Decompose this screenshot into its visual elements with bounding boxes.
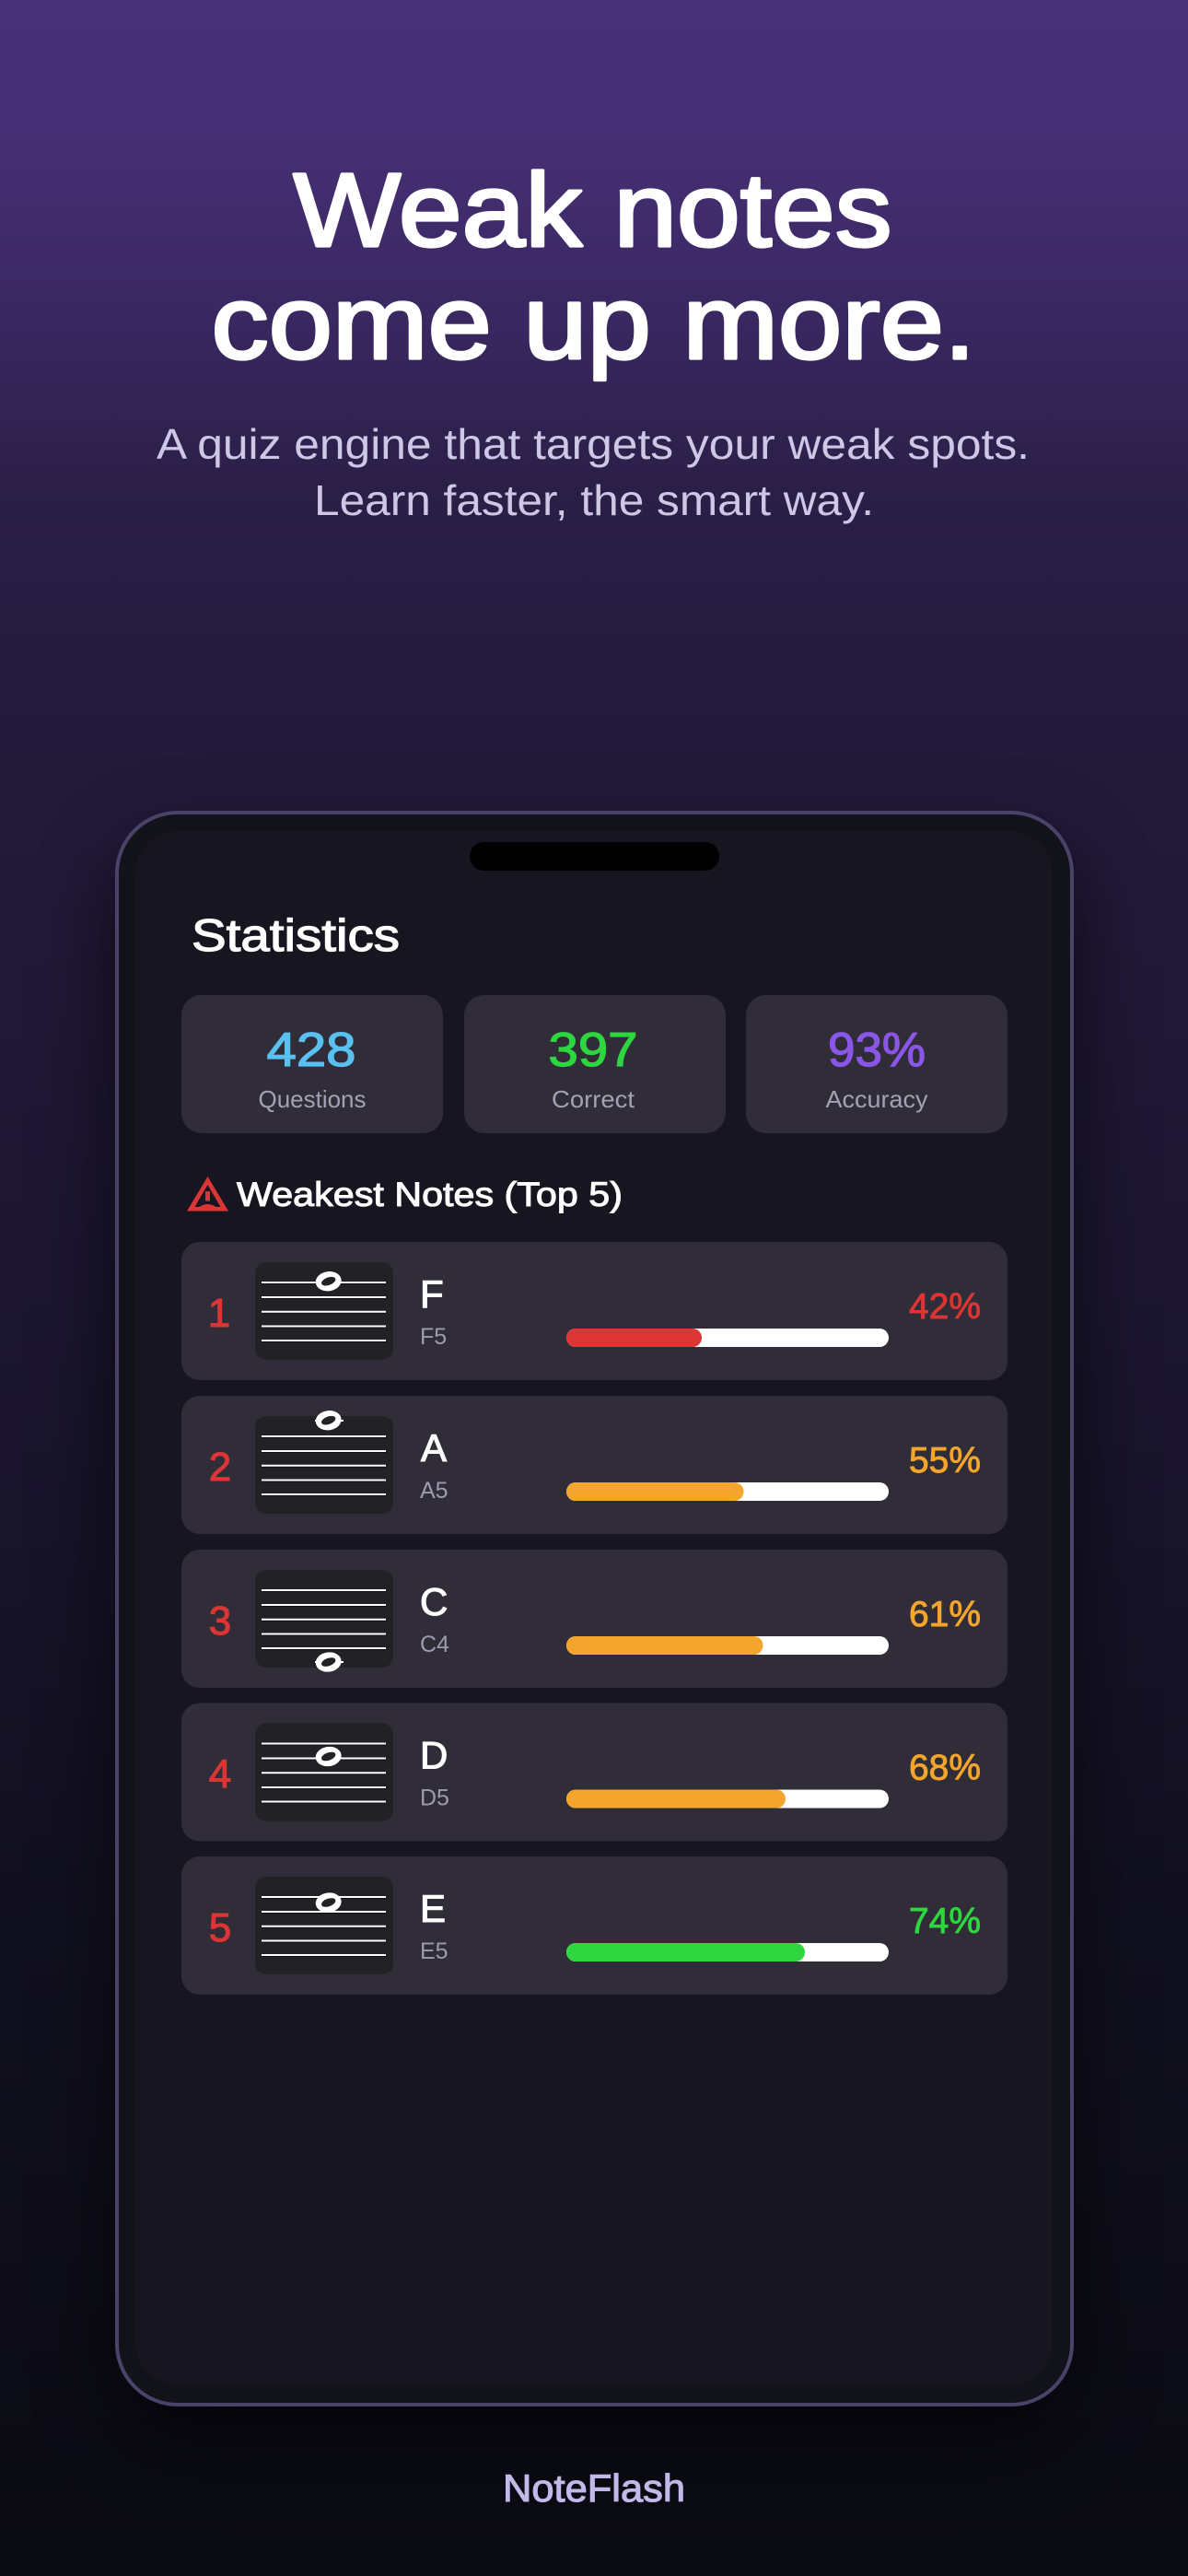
octave C4: C4 xyxy=(420,1632,449,1657)
rank 3: 3 xyxy=(209,1598,231,1644)
progress bar 74 xyxy=(566,1943,889,1961)
note row 1: F5 xyxy=(181,1242,1007,1380)
phone shadow xyxy=(115,843,1073,2439)
percent 55: 55% xyxy=(909,1441,981,1481)
notch xyxy=(470,842,719,871)
phone screen xyxy=(135,831,1053,2384)
rank 2: 2 xyxy=(209,1445,231,1490)
progress bar 55 xyxy=(566,1482,889,1501)
note row 3: C4 xyxy=(181,1550,1007,1688)
section heading: weakest notes: Weakest Notes (Top 5) xyxy=(237,1176,623,1213)
screen heading: Statistics: Statistics xyxy=(192,911,400,961)
percent 68: 68% xyxy=(909,1749,981,1787)
note name C: C xyxy=(420,1580,448,1623)
stat card: correct: 397 xyxy=(549,1024,637,1077)
stat card: questions: 428 xyxy=(267,1024,355,1077)
progress bar 42 xyxy=(566,1329,889,1347)
stat card: accuracy: 93% xyxy=(828,1024,926,1077)
octave D5: D5 xyxy=(420,1786,449,1811)
title xyxy=(212,152,976,381)
note row 5: E5 xyxy=(181,1856,1007,1995)
staff thumbnail F5 xyxy=(255,1262,393,1360)
percent 42: 42% xyxy=(909,1287,981,1327)
stat card: correct: Correct xyxy=(552,1085,635,1113)
phone frame xyxy=(117,813,1072,2405)
rank 1: 1 xyxy=(208,1291,230,1336)
octave F5: F5 xyxy=(420,1324,447,1350)
percent 74: 74% xyxy=(909,1902,981,1941)
percent 61: 61% xyxy=(909,1595,981,1634)
stat card: questions: Questions xyxy=(258,1085,367,1113)
title: come up more. xyxy=(212,264,976,381)
rank 4: 4 xyxy=(209,1752,231,1797)
subtitle: A quiz engine that targets your weak spots. xyxy=(157,420,1030,468)
subtitle: Learn faster, the smart way. xyxy=(314,476,874,524)
staff thumbnail C4 xyxy=(255,1570,393,1673)
footer brand: NoteFlash xyxy=(503,2466,685,2510)
stat card: accuracy: Accuracy xyxy=(825,1085,928,1113)
staff thumbnail A5 xyxy=(255,1409,393,1514)
stat card: accuracy xyxy=(746,995,1007,1133)
title: Weak notes xyxy=(293,152,891,268)
octave A5: A5 xyxy=(420,1478,448,1504)
note name F: F xyxy=(420,1272,444,1316)
note row 2: A5 xyxy=(181,1396,1007,1534)
note name D: D xyxy=(420,1734,448,1776)
stat card: correct xyxy=(464,995,726,1133)
staff thumbnail E5 xyxy=(255,1877,393,1974)
progress bar 68 xyxy=(566,1789,889,1808)
octave E5: E5 xyxy=(420,1938,448,1964)
note name A: A xyxy=(421,1426,447,1469)
staff thumbnail D5 xyxy=(255,1723,393,1821)
note row 4: D5 xyxy=(181,1703,1007,1841)
rank 5: 5 xyxy=(209,1905,231,1950)
phone mockup xyxy=(117,813,1072,2405)
note name E: E xyxy=(420,1887,446,1930)
stat card: questions xyxy=(181,995,443,1133)
subtitle xyxy=(157,420,1030,524)
icon: warning triangle xyxy=(187,1177,228,1211)
progress bar 61 xyxy=(566,1636,889,1655)
